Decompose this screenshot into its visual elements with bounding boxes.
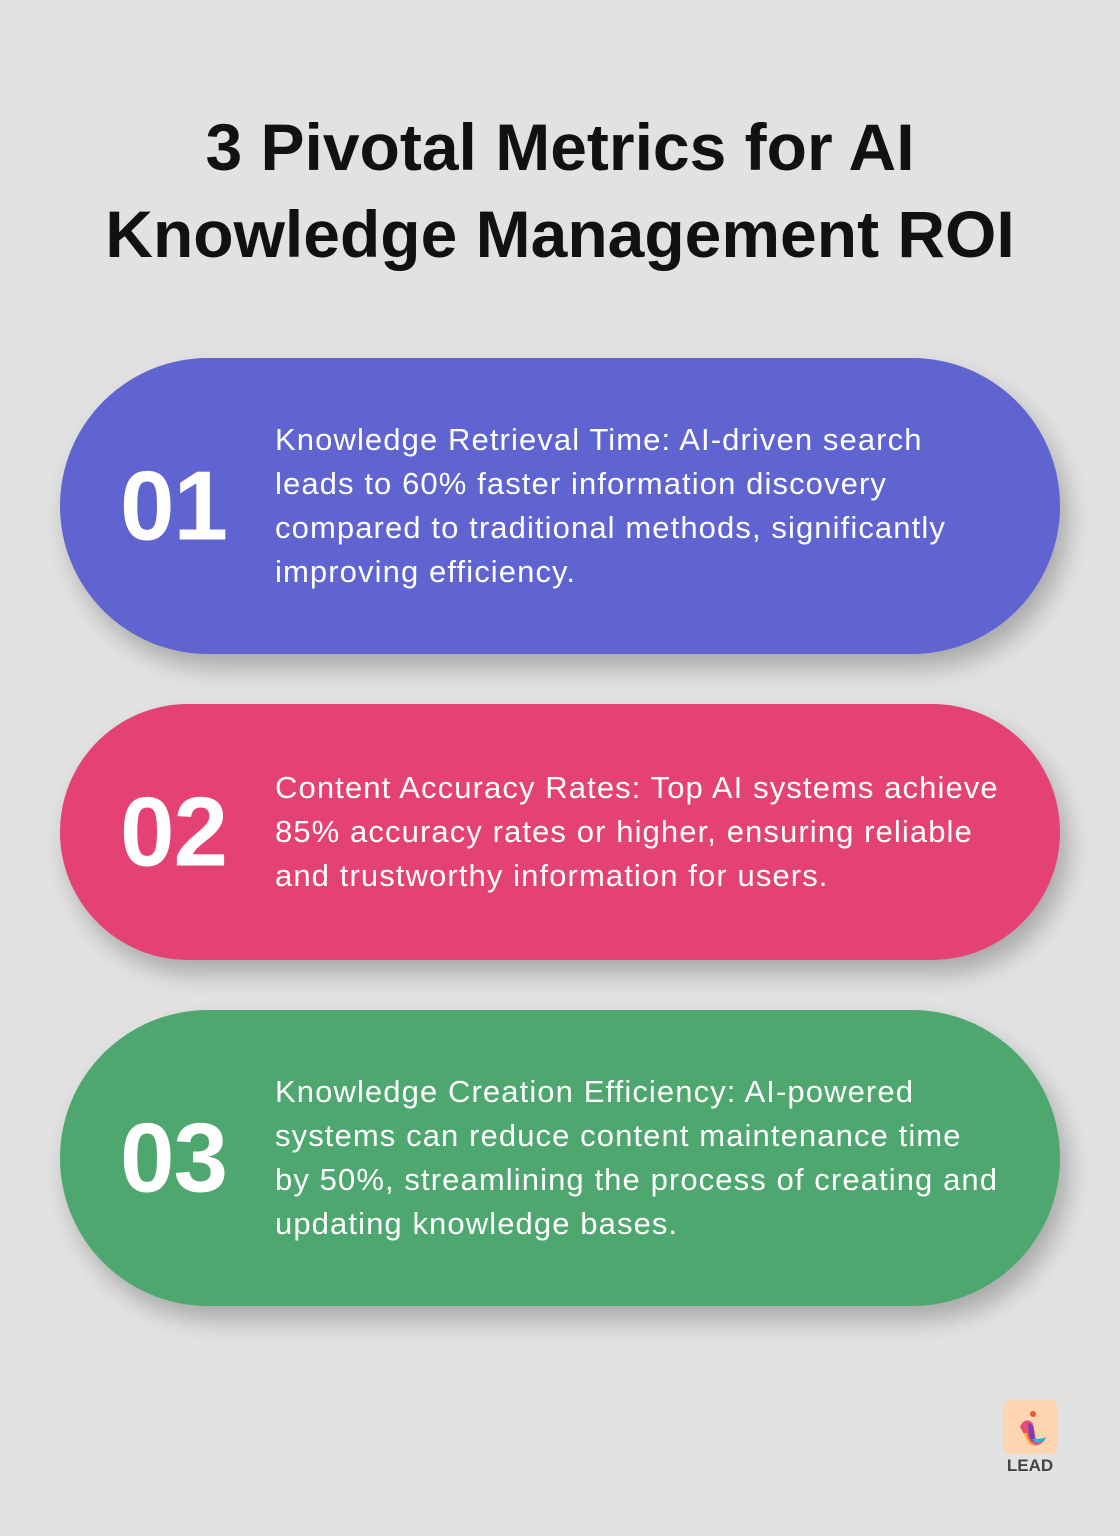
text 01: Knowledge Retrieval Time: AI-driven search xyxy=(275,422,923,457)
panel: metric 01 xyxy=(60,358,1060,654)
number 03: 03 xyxy=(120,1102,227,1212)
text 01: compared to traditional methods, significantly xyxy=(275,510,946,545)
number 02: 02 xyxy=(120,776,227,886)
text 02: and trustworthy information for users. xyxy=(275,858,829,893)
panel: metric 02 xyxy=(60,704,1060,960)
text 01: improving efficiency. xyxy=(275,554,576,589)
logo text: LEAD xyxy=(1007,1456,1053,1475)
text 02 xyxy=(275,770,999,893)
logo xyxy=(1003,1400,1057,1475)
text 01 xyxy=(275,422,946,589)
text 02: Content Accuracy Rates: Top AI systems achieve xyxy=(275,770,999,805)
text 03: updating knowledge bases. xyxy=(275,1206,678,1241)
number 01: 01 xyxy=(120,450,227,560)
text 03 xyxy=(275,1074,998,1241)
icon: logo mark xyxy=(1003,1400,1057,1454)
text 02: 85% accuracy rates or higher, ensuring reliable xyxy=(275,814,973,849)
text 03: by 50%, streamlining the process of creating and xyxy=(275,1162,998,1197)
text 03: systems can reduce content maintenance time xyxy=(275,1118,962,1153)
text 01: leads to 60% faster information discovery xyxy=(275,466,887,501)
title: 3 Pivotal Metrics for AI xyxy=(205,110,915,184)
text 03: Knowledge Creation Efficiency: AI-powered xyxy=(275,1074,914,1109)
title xyxy=(105,110,1015,271)
panel: metric 03 xyxy=(60,1010,1060,1306)
title: Knowledge Management ROI xyxy=(105,197,1015,271)
